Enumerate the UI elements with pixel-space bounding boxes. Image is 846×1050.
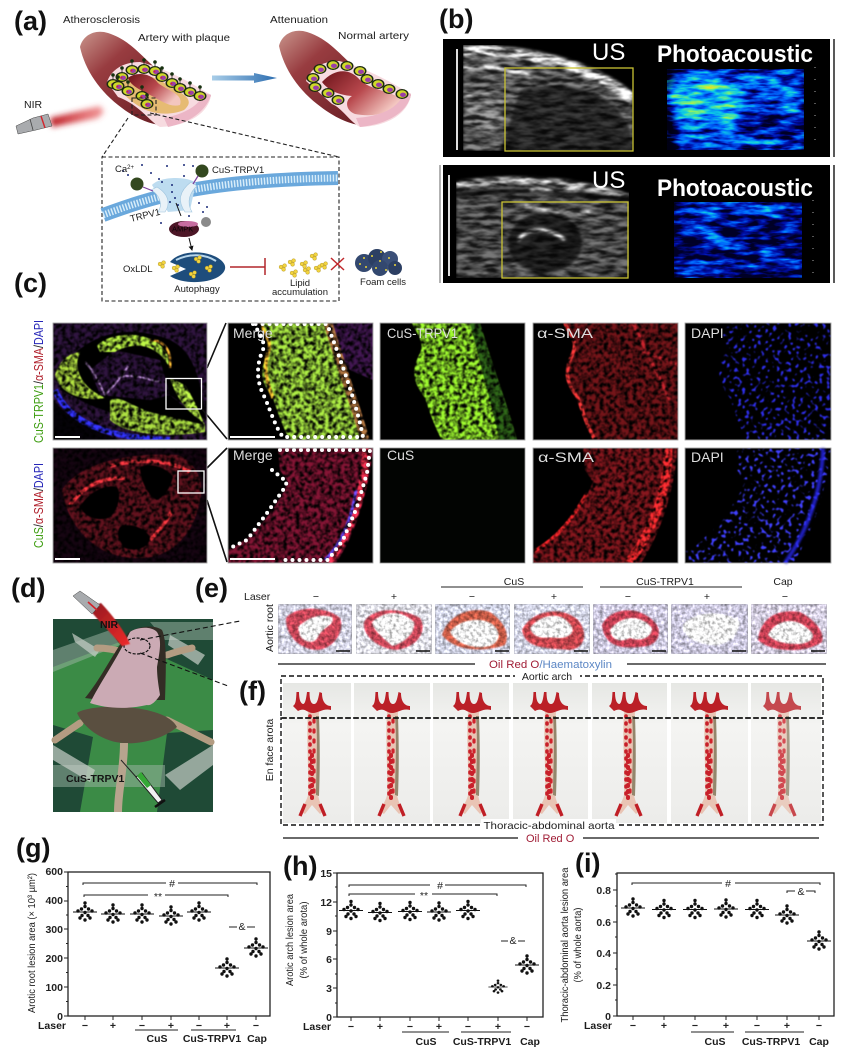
micrograph: overview row 2 (53, 448, 207, 563)
text: Foam cells: Foam cells (360, 277, 406, 288)
x axis groups: − (754, 1020, 760, 1032)
laser row: + (551, 591, 557, 603)
x axis groups: CuS-TRPV1 (742, 1036, 800, 1048)
aorta 1 (293, 692, 331, 816)
y axis title: (% of whole arota) (298, 902, 310, 978)
micrograph: DAPI row 1 (685, 323, 831, 440)
dashed guide lines (140, 621, 240, 686)
dashed target circle (124, 638, 150, 654)
heading: panel a: (a) (14, 6, 47, 36)
x axis groups: + (661, 1020, 667, 1032)
y axis title (559, 867, 584, 1022)
significance brackets: & (238, 921, 246, 933)
x axis groups: Cap (247, 1033, 267, 1045)
scatter data (339, 902, 539, 993)
panel: (b) ultrasound and photoacoustic imaging (439, 4, 834, 283)
thumb 4 (514, 604, 590, 654)
rotated label row 2: CuS/α-SMA/DAPI (31, 463, 46, 548)
inset marker (178, 471, 204, 493)
aorta 2 (372, 692, 410, 816)
x axis groups: − (816, 1020, 822, 1032)
panel: (c) immunofluorescence (14, 268, 831, 563)
photoacoustic heat map 2 (674, 202, 802, 278)
icon: normal artery (279, 31, 411, 127)
mouse tail (118, 743, 124, 812)
dotted boundary (253, 324, 363, 437)
scale bar (448, 175, 450, 276)
x axis groups: − (139, 1020, 145, 1032)
callout: zoom lines and dashed inset marker (102, 98, 339, 157)
text: alpha-SMA: α-SMA (537, 325, 594, 341)
text: US: US (592, 39, 625, 66)
y tick labels: 600 (45, 866, 63, 878)
rotated label: En face arota: En face arota (264, 719, 276, 781)
panel: (a) NIR mechanism schematic (14, 6, 411, 301)
x axis groups: Laser (38, 1020, 66, 1032)
panel: (g) arotic root lesion chart (16, 833, 270, 1045)
thumb 6 (671, 604, 748, 654)
thumb 3 (435, 604, 510, 654)
axes (613, 873, 834, 1020)
panel: (f) en face aorta (239, 670, 823, 845)
micrograph: alpha-SMA row 2 (533, 448, 678, 563)
aorta photographs (283, 683, 821, 823)
text: alpha-SMA: α-SMA (538, 449, 595, 465)
aorta 4 (530, 692, 568, 816)
rotated label: Aortic root: Aortic root (264, 604, 276, 652)
laser row: − (782, 591, 788, 603)
axes (333, 873, 543, 1021)
x axis groups: − (630, 1020, 636, 1032)
x axis groups: − (465, 1021, 471, 1033)
x axis groups: − (196, 1020, 202, 1032)
text: Autophagy: Autophagy (174, 284, 220, 295)
laser row: Laser (244, 591, 271, 603)
micrograph: overview row 1 (53, 323, 207, 440)
panel: mechanism inset (102, 157, 339, 301)
text: Thoracic-abdominal aorta: Thoracic-abdominal aorta (484, 820, 615, 832)
x axis groups: − (692, 1020, 698, 1032)
significance brackets: ** (154, 891, 162, 903)
thumb 1 (278, 604, 352, 654)
thumb 5 (593, 604, 668, 654)
text: Aortic arch: Aortic arch (522, 671, 572, 683)
significance brackets (632, 878, 820, 898)
y tick labels: 0 (57, 1011, 63, 1023)
aorta 6 (690, 692, 728, 816)
y axis title: Thoracic-abdominal aorta lesion area (559, 867, 571, 1022)
icon: CuS nanoparticles (130, 164, 208, 191)
y tick labels (45, 866, 63, 1023)
aorta 5 (609, 692, 647, 816)
y tick labels (596, 885, 611, 1023)
panel: (d) mouse photograph (11, 573, 240, 812)
icon: lipid droplets (279, 253, 328, 277)
y tick labels: 400 (45, 895, 63, 907)
panel borders (53, 323, 831, 563)
x axis groups: + (495, 1021, 501, 1033)
text: DAPI: DAPI (691, 325, 724, 341)
arrows: signalling (176, 203, 192, 250)
ultrasound image 1 (463, 45, 633, 151)
text: US: US (592, 167, 625, 194)
x axis groups: − (348, 1021, 354, 1033)
x axis groups: CuS (704, 1036, 726, 1048)
icon: red cross (331, 258, 344, 270)
y tick labels: 3 (326, 983, 332, 995)
dotted boundary (230, 450, 370, 560)
icon: NIR laser probe (16, 106, 104, 134)
image row 1 (443, 39, 830, 157)
heading: panel f: (f) (239, 676, 266, 706)
icon: syringe (121, 760, 165, 807)
icon: NIR probe and beam (73, 591, 130, 646)
micrograph: DAPI row 2 (685, 448, 831, 563)
depth ticks (814, 67, 816, 150)
y axis title: Arotic arch lesion area (284, 894, 296, 986)
y tick labels: 0.4 (596, 948, 611, 960)
photo: treated mouse (53, 619, 213, 812)
x axis groups: + (377, 1021, 383, 1033)
text: CuS-TRPV1: CuS-TRPV1 (66, 773, 124, 785)
histology thumbnails (278, 604, 827, 654)
depth ticks (812, 200, 814, 278)
laser row: + (391, 591, 397, 603)
laser row: − (625, 591, 631, 603)
laser row: − (313, 591, 319, 603)
icon: AMPK enzyme (169, 217, 211, 237)
y tick labels: 0 (326, 1012, 332, 1024)
arrow: attenuation (212, 73, 277, 83)
heading: panel h: (h) (283, 851, 317, 881)
y axis title: Arotic root lesion area (× 10³ µm²) (26, 873, 38, 1013)
x axis groups: Cap (809, 1036, 829, 1048)
x axis groups: CuS-TRPV1 (183, 1033, 241, 1045)
x axis groups: CuS (146, 1033, 168, 1045)
text: Lipid accumulation: accumulation (272, 287, 328, 298)
scatter data (73, 903, 268, 976)
x axis groups (38, 1020, 267, 1045)
y tick labels: 6 (326, 954, 332, 966)
scale bar (456, 49, 458, 150)
heading: panel i: (i) (575, 848, 600, 878)
scale bar (230, 436, 275, 438)
micrograph: CuS-TRPV1 (380, 323, 525, 440)
text: TRPV1: TRPV1 (129, 207, 161, 225)
y tick labels: 0.6 (596, 917, 611, 929)
micrograph: CuS row 2 (380, 447, 525, 563)
x axis groups: Cap (520, 1036, 540, 1048)
scale bar (230, 558, 275, 560)
text: NIR: NIR (100, 619, 118, 631)
x axis groups: + (436, 1021, 442, 1033)
significance brackets: & (797, 886, 805, 898)
text: CuS-TRPV1: CuS-TRPV1 (387, 325, 458, 341)
text: Merge: Merge (233, 325, 273, 341)
panel: (e) aortic root histology (195, 573, 827, 671)
y tick labels: 15 (320, 868, 332, 880)
scale bar (55, 558, 80, 560)
scale bars (336, 650, 825, 652)
icon: autophagosome (158, 252, 225, 282)
icon: TRPV1 channel (151, 178, 197, 212)
dashed regions (281, 670, 823, 831)
y tick labels: 0.8 (596, 885, 611, 897)
x axis groups (584, 1020, 829, 1048)
significance brackets: # (437, 880, 443, 892)
text: Atherosclerosis: Atherosclerosis (63, 14, 140, 26)
heading: panel c: (c) (14, 268, 47, 298)
thumb 7 (751, 604, 827, 654)
x axis groups: + (224, 1020, 230, 1032)
micrograph: Merge row 1 (228, 323, 373, 440)
text: DAPI: DAPI (691, 449, 724, 465)
group header (441, 576, 793, 588)
mouse limbs (55, 648, 211, 742)
x axis groups: − (82, 1020, 88, 1032)
text: Normal artery: Normal artery (338, 30, 410, 42)
mouse torso (90, 628, 160, 708)
significance brackets: ** (420, 890, 428, 902)
group header: Cap (773, 576, 793, 588)
micrograph: alpha-SMA row 1 (533, 323, 678, 440)
x axis groups: + (168, 1020, 174, 1032)
inhibition symbol (230, 258, 265, 275)
heading: panel b: (b) (439, 4, 473, 34)
y tick labels: 0 (605, 1011, 611, 1023)
image row 2 (443, 165, 830, 283)
calcium ion dots (123, 165, 207, 223)
stain caption: Oil Red O / Haematoxylin: Oil Red O/Haematoxylin (489, 659, 612, 671)
x axis groups: CuS (416, 1036, 436, 1048)
icon: artery with plaque (80, 32, 211, 127)
x axis groups: − (524, 1021, 530, 1033)
scatter data (621, 899, 831, 949)
icon: foam cells (355, 249, 402, 276)
yellow ROI box (502, 202, 628, 278)
y tick labels: 300 (45, 924, 63, 936)
x axis groups: − (253, 1020, 259, 1032)
heading: panel d: (d) (11, 573, 45, 603)
y tick labels: 200 (45, 953, 63, 965)
x axis groups: + (723, 1020, 729, 1032)
significance brackets: # (169, 878, 175, 890)
panel: (h) arotic arch lesion chart (283, 851, 543, 1048)
y tick labels: 12 (320, 897, 332, 909)
icon: AMPK enzyme: AMPK (172, 224, 193, 234)
mouse fur (85, 627, 166, 700)
heading: panel e: (e) (195, 573, 228, 603)
scale bar (55, 436, 80, 438)
y tick labels (320, 868, 332, 1024)
aorta 7 (763, 692, 801, 816)
text: Photoacoustic: Photoacoustic (657, 41, 813, 68)
x axis groups: CuS-TRPV1 (453, 1036, 511, 1048)
text: OxLDL: OxLDL (123, 264, 153, 275)
text: Attenuation: Attenuation (270, 14, 328, 26)
aorta 3 (453, 692, 491, 816)
text: Lipid accumulation: Lipid (290, 278, 310, 289)
text: NIR: NIR (24, 99, 42, 111)
x axis groups (303, 1021, 540, 1048)
x axis groups: + (110, 1020, 116, 1032)
rotated label row 1: CuS-TRPV1/α-SMA/DAPI (31, 320, 46, 443)
text: Ca2+: Ca (115, 164, 127, 175)
group header: CuS-TRPV1 (636, 576, 694, 588)
significance brackets: & (509, 935, 517, 947)
text: CuS: CuS (387, 447, 414, 463)
laser row (244, 591, 788, 603)
significance brackets: # (725, 878, 731, 890)
ultrasound image 2 (456, 172, 630, 278)
x axis groups: − (407, 1021, 413, 1033)
inset marker (166, 378, 202, 409)
y axis title (284, 894, 310, 986)
zoom guide lines (202, 323, 227, 562)
x axis groups: Laser (584, 1020, 612, 1032)
y tick labels: 0.2 (596, 980, 611, 992)
axes (64, 872, 270, 1020)
x axis groups: + (784, 1020, 790, 1032)
heading: panel g: (g) (16, 833, 50, 863)
membrane (103, 178, 338, 215)
laser row: − (469, 591, 475, 603)
text: CuS-TRPV1: CuS-TRPV1 (212, 165, 264, 176)
laser row: + (704, 591, 710, 603)
text: Ca2+: 2+ (127, 165, 134, 171)
micrograph: Merge row 2 (228, 447, 373, 563)
text: Photoacoustic: Photoacoustic (657, 175, 813, 202)
x axis groups: Laser (303, 1021, 331, 1033)
hot streak (676, 136, 700, 138)
group header: CuS (504, 576, 524, 588)
panel: (i) thoracic-abdominal lesion chart (559, 848, 834, 1048)
yellow ROI box (505, 68, 633, 151)
significance brackets (349, 880, 526, 947)
y axis title: (% of whole aorta) (572, 908, 584, 982)
significance brackets (83, 878, 257, 933)
y tick labels: 9 (326, 926, 332, 938)
photoacoustic heat map 1 (667, 69, 804, 150)
stain caption: Oil Red O: Oil Red O (526, 833, 575, 845)
y tick labels: 100 (45, 982, 63, 994)
side rules (833, 39, 835, 283)
thumb 2 (356, 604, 432, 654)
text: Merge: Merge (233, 447, 273, 463)
text: Artery with plaque: Artery with plaque (138, 32, 230, 44)
